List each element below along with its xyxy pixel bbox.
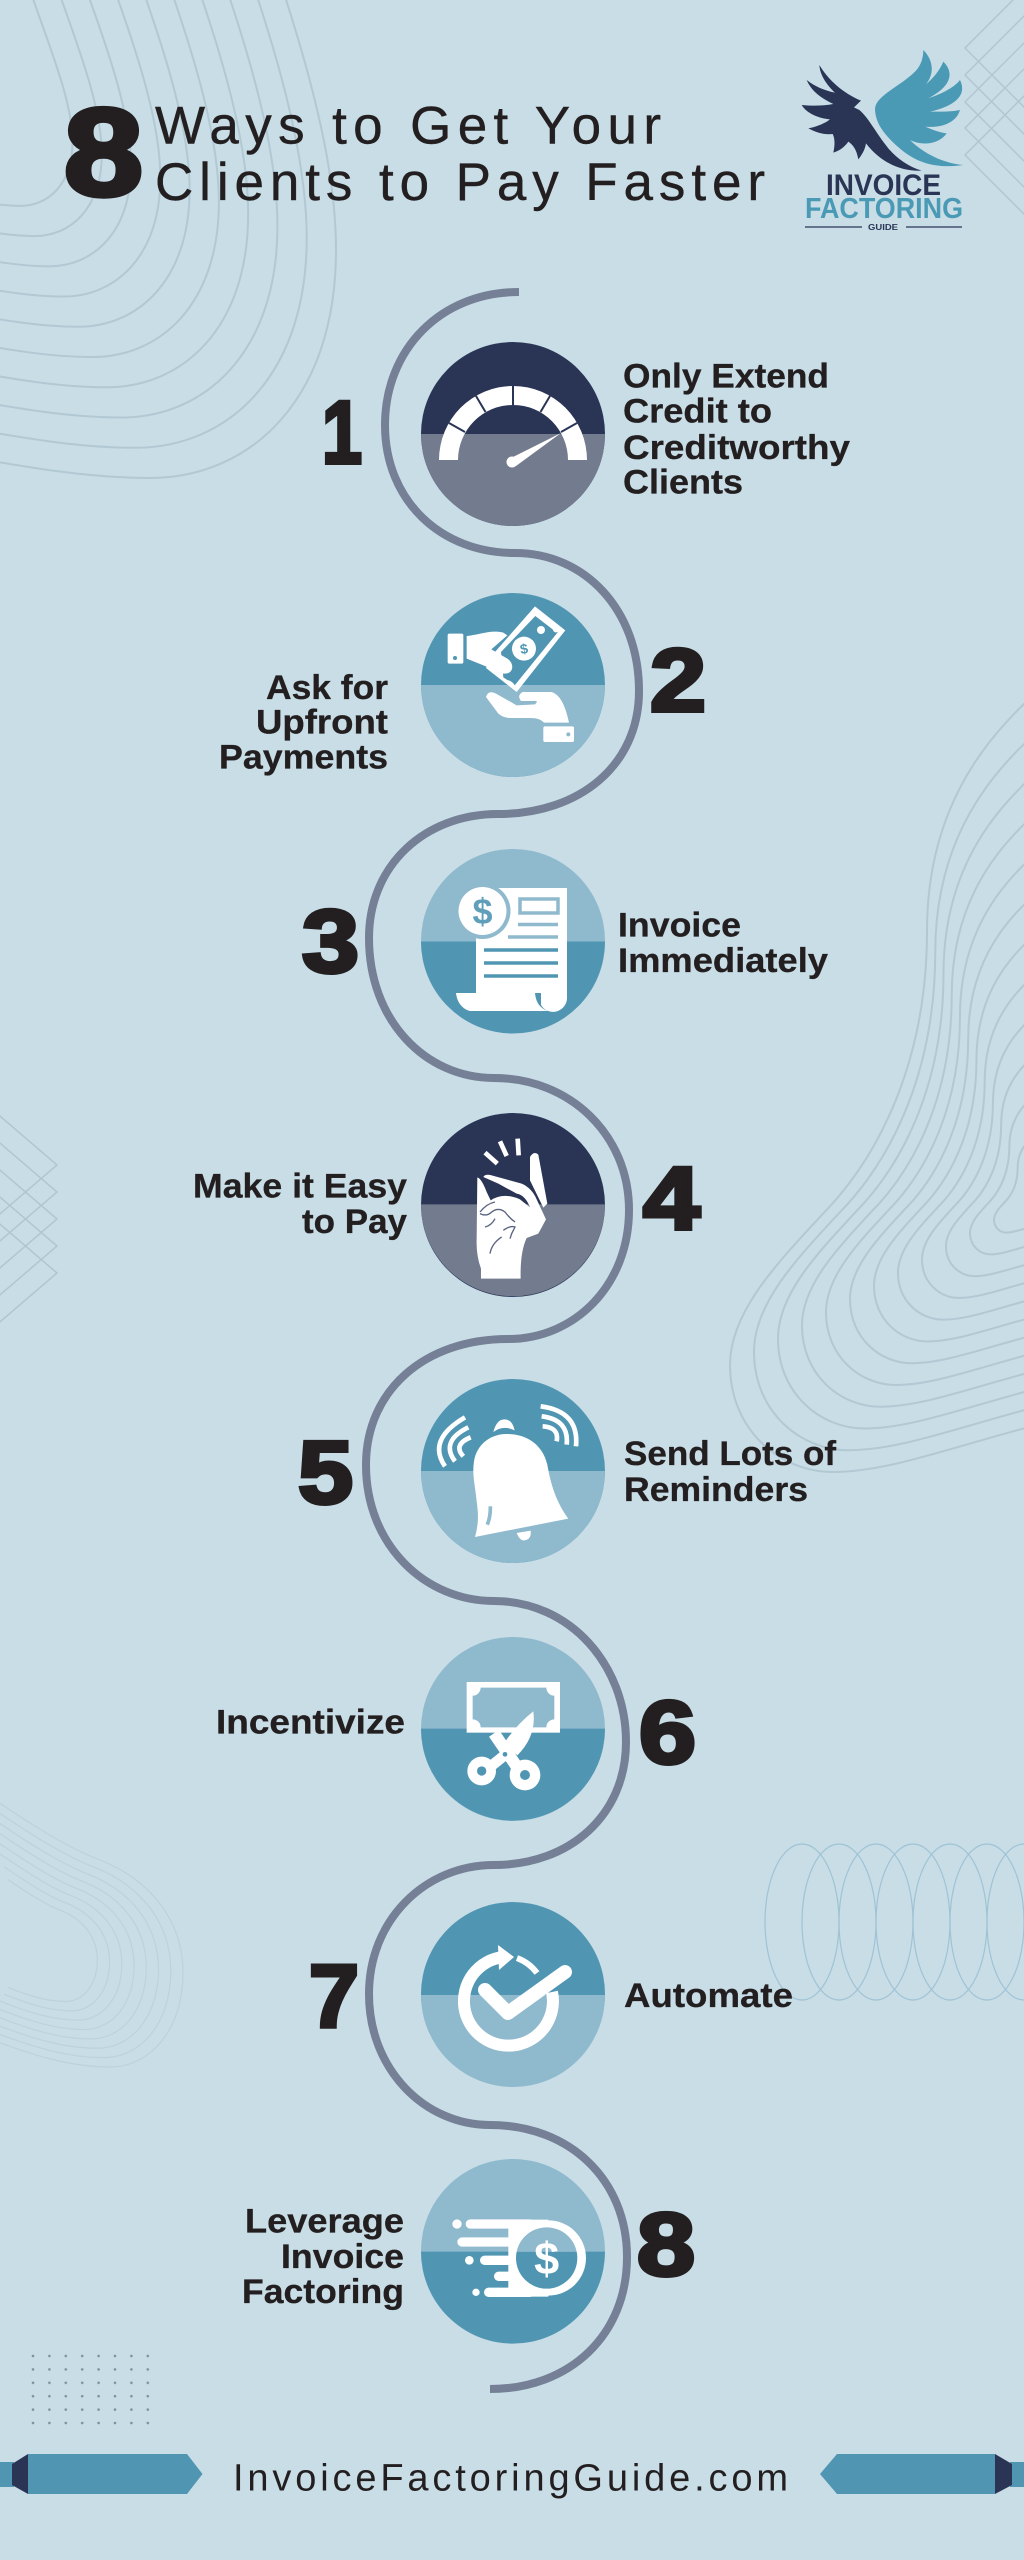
left ribbon	[0, 2454, 202, 2494]
label: Leverage	[245, 2202, 404, 2240]
title	[64, 84, 765, 222]
label: Automate	[624, 1977, 793, 2015]
icon: fast money coin: $	[534, 2233, 559, 2284]
label: Factoring	[242, 2273, 404, 2311]
label: Send Lots of	[624, 1435, 837, 1473]
icon: credit gauge	[421, 342, 605, 526]
icon: invoice document: $	[472, 891, 493, 932]
number 4: 4	[643, 1148, 701, 1248]
label: to Pay	[302, 1203, 407, 1241]
logo	[802, 50, 963, 232]
icon: scissors cutting money	[421, 1637, 605, 1821]
winding path	[366, 292, 639, 2389]
step 7	[309, 1902, 793, 2087]
label: Creditworthy	[623, 429, 850, 467]
decorative contour lines bottom left	[0, 1790, 183, 2067]
label	[242, 2202, 404, 2311]
label	[618, 906, 828, 980]
step 3	[302, 849, 828, 1034]
big numeral 8: 8	[64, 84, 143, 222]
icon: automation check	[421, 1902, 605, 2087]
step 5	[298, 1379, 837, 1563]
label: Reminders	[624, 1471, 808, 1509]
label: Incentivize	[216, 1704, 405, 1742]
step 2	[219, 593, 706, 777]
label: Upfront	[256, 704, 388, 742]
label: Clients	[623, 464, 743, 502]
logo text factoring: FACTORING	[805, 193, 963, 225]
step 6	[216, 1637, 696, 1821]
decorative lattice left	[0, 1105, 57, 1333]
footer	[0, 2454, 1024, 2500]
number 2: 2	[650, 630, 706, 730]
label: Credit to	[623, 392, 772, 430]
icon: hands and money	[421, 593, 605, 777]
step 8	[242, 2159, 695, 2344]
right ribbon	[820, 2454, 1024, 2494]
icon: snapping hand	[421, 1113, 605, 1297]
icon: fast money coin	[421, 2159, 605, 2344]
label	[219, 669, 388, 776]
decorative contour lines top left	[0, 0, 336, 478]
step 4	[193, 1113, 701, 1297]
label: Invoice	[281, 2238, 404, 2276]
number 6: 6	[639, 1682, 696, 1782]
decorative contour lines right	[730, 640, 1024, 1472]
label: Make it Easy	[193, 1168, 407, 1206]
logo text guide: GUIDE	[868, 222, 898, 232]
label: Only Extend	[623, 358, 829, 396]
title line one: Ways to Get Your	[155, 96, 661, 156]
step 1	[322, 342, 850, 526]
label: Payments	[219, 738, 388, 776]
title line two: Clients to Pay Faster	[155, 153, 765, 212]
decorative lattice top right	[965, 0, 1024, 225]
number 8: 8	[637, 2194, 695, 2294]
website url: InvoiceFactoringGuide.com	[233, 2458, 788, 2500]
label	[624, 1435, 837, 1509]
label: Invoice	[618, 906, 741, 944]
decorative dot grid	[30, 2350, 152, 2428]
label: Ask for	[266, 669, 388, 707]
number 5: 5	[298, 1422, 353, 1522]
number 1: 1	[322, 382, 362, 482]
number 3: 3	[302, 891, 359, 991]
label	[623, 358, 850, 502]
label	[193, 1168, 407, 1241]
logo eagle	[802, 50, 963, 171]
logo text invoice: INVOICE	[826, 169, 941, 202]
label: Immediately	[618, 942, 828, 980]
icon: hands and money: $	[519, 640, 529, 657]
decorative ellipses right	[765, 1844, 1024, 2000]
number 7: 7	[309, 1946, 359, 2046]
icon: invoice document	[421, 849, 605, 1034]
icon: ringing bell	[421, 1379, 605, 1563]
